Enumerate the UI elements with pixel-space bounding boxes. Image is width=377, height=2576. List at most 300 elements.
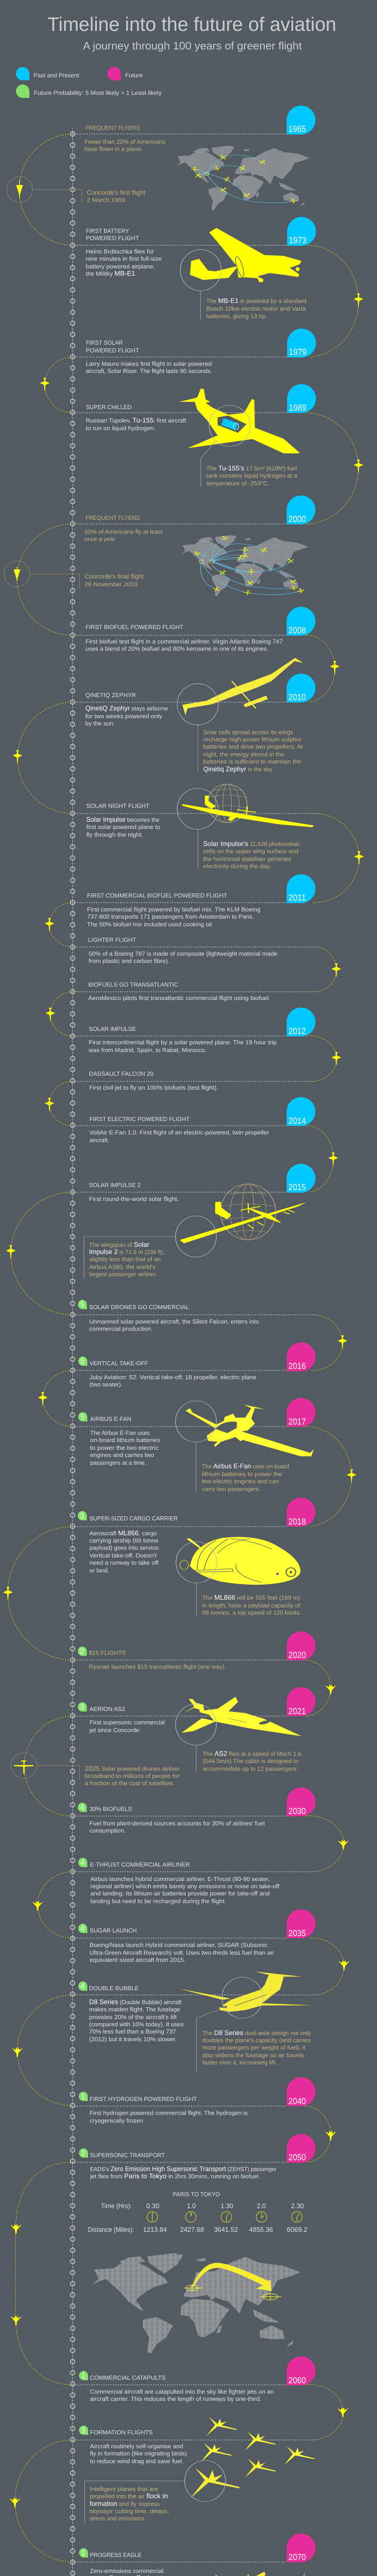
heading: $15 FLIGHTS <box>89 1650 126 1656</box>
clock icons <box>147 2212 302 2222</box>
body text <box>90 1529 160 1574</box>
heading: POWERED FLIGHT <box>86 348 139 354</box>
body text <box>88 1040 277 1054</box>
event connector lines <box>73 134 315 2562</box>
body text: battery powered airplane, <box>86 264 155 270</box>
table: Paris to Tokyo: 6069.2 <box>287 2226 307 2233</box>
heading: FORMATION FLIGHTS <box>90 2430 153 2436</box>
legend: past and present: Past and Present <box>33 73 79 79</box>
year markers: 2000 <box>288 514 306 524</box>
heading: SOLAR IMPULSE <box>89 1026 136 1032</box>
callout text <box>203 730 303 773</box>
table: Paris to Tokyo <box>88 2192 307 2233</box>
body text: payload) goes into service. <box>90 1545 160 1551</box>
callout text: The D8 Series dual-aisle design not only <box>202 2029 311 2037</box>
concorde final flight callout: Concorde's final flight <box>84 573 144 580</box>
body text: First civil jet to fly on 100% biofuels (test flight). <box>89 1085 218 1091</box>
year markers: 2040 <box>288 2096 306 2106</box>
callout text: The MB-E1 is powered by a standard <box>206 297 306 304</box>
body text: commercial production. <box>89 1326 153 1332</box>
callout text: faster over it, increasing lift. <box>202 2060 277 2066</box>
callout text: Solar cells spread across its wings <box>203 730 294 736</box>
legend: future probability <box>16 84 162 98</box>
body text <box>90 1430 160 1466</box>
1979 first solar powered flight <box>86 340 212 375</box>
year markers: 1979 <box>289 347 306 357</box>
2060 commercial catapults <box>90 2375 274 2402</box>
body text: First biofuel test flight in a commercial airliner. Virgin Atlantic Boeing 747 <box>85 639 283 645</box>
body text: The 50% biofuel mix included used cooking oil. <box>87 922 214 928</box>
2012 solar impulse <box>88 1026 277 1054</box>
legend: future: Future <box>125 73 143 79</box>
body text: 50% of Americans fly at least <box>84 529 163 535</box>
callout text <box>203 1750 303 1772</box>
heading: AIRBUS E-FAN <box>90 1416 131 1422</box>
callout text: The Tu-155's 17.5m³ (618ft³) fuel <box>206 464 297 472</box>
heading: COMMERCIAL CATAPULTS <box>90 2375 166 2381</box>
heading: FIRST BATTERY <box>86 228 129 234</box>
2070 progress eagle <box>90 2552 306 2576</box>
table: Paris to Tokyo: Distance (Miles): <box>88 2226 134 2233</box>
heading: SUPERSONIC TRANSPORT <box>90 2153 165 2159</box>
body text: provides 20% of the aircraft's lift <box>89 2014 177 2021</box>
2020 $15 flights <box>89 1650 226 1670</box>
callout text: in length, have a payload capacity of <box>202 1603 300 1609</box>
callout text: Intelligent planes that are <box>90 2486 158 2493</box>
heading <box>86 228 139 242</box>
year markers: 2020 <box>288 1650 306 1660</box>
probability badges: 4 <box>80 1858 84 1867</box>
body text: once a year. <box>84 536 116 543</box>
plane: Aerion AS2 <box>176 1697 302 1773</box>
body text: D8 Series (Double Bubble) aircraft <box>89 1998 182 2006</box>
concorde final flight callout <box>4 561 144 588</box>
callout text: Solar Impulse's 11,628 photovoltaic <box>203 840 300 848</box>
body text: Zero-emissions commercial <box>90 2568 163 2574</box>
plane: Zephyr <box>177 658 303 772</box>
callout text: carry two passengers. <box>202 1486 261 1493</box>
body text: Ultra-Green Aircraft Research) volt. Uses two-thirds less fuel than an <box>90 1950 274 1956</box>
body text: 50% of a Boeing 787 is made of composite (lightweight material made <box>89 951 278 957</box>
callout text <box>206 464 298 487</box>
probability badges: 5 <box>80 1413 84 1421</box>
callout text: the horizontal stabiliser generate <box>203 856 292 862</box>
year markers: 2030 <box>288 1806 306 1816</box>
heading: SOLAR IMPULSE 2 <box>89 1182 141 1189</box>
body text: jet flies from Paris to Tokyo in 2hrs 30mins, running on biofuel. <box>90 2172 260 2180</box>
callout text <box>90 2486 169 2522</box>
table: Paris to Tokyo: 2.30 <box>291 2202 304 2210</box>
heading: QINETIQ ZEPHYR <box>85 692 136 699</box>
body text: regional airliner) which emits barely any emissions or noise on take-off <box>91 1884 280 1890</box>
body text: Heino Brditschka flies for <box>86 249 154 255</box>
body text: cryogenically frozen. <box>90 2118 145 2124</box>
2000 frequent flyers <box>4 515 309 597</box>
legend: future probability: Future Probability: 5 Most likely > 1 Least likely <box>34 90 162 96</box>
year markers: 2008 <box>288 625 306 635</box>
body text <box>86 416 186 432</box>
body text <box>90 2165 277 2180</box>
callout text: more passengers per weight of fuel), it <box>202 2045 306 2051</box>
body text: passengers at a time. <box>90 1460 146 1466</box>
year markers: 1973 <box>289 235 306 245</box>
body text: Boeing/Nasa launch Hybrid commercial airliner, SUGAR (Subsonic <box>90 1942 268 1948</box>
body text: by the sun. <box>85 721 115 727</box>
table: Paris to Tokyo: 0.30 <box>146 2202 160 2210</box>
probability badges: 4 <box>80 1982 84 1991</box>
body text: Solar Impulse becomes the <box>87 816 160 823</box>
callout text: two electric engines and can <box>202 1479 279 1485</box>
heading: E-THRUST COMMERCIAL AIRLINER <box>90 1862 190 1868</box>
2011 first commercial biofuel powered flight <box>87 893 261 928</box>
callout text: stress and emissions. <box>90 2516 146 2522</box>
body text: 737-800 transports 171 passengers from Amsterdam to Paris. <box>87 914 254 920</box>
body text: to reduce wind drag and save fuel. <box>90 2459 184 2465</box>
body text: Commercial aircraft are catapulted into the sky like fighter jets on an <box>90 2389 274 2395</box>
body text: Ryanair launches $15 transatlantic flight (one way). <box>89 1664 226 1670</box>
body text: Fuel from plant-derived sources accounts for 30% of airlines' fuel <box>90 1821 265 1827</box>
2017 airbus e-fan <box>90 1401 314 1493</box>
body text: Aircraft routinely self-organise and <box>90 2444 183 2450</box>
title: Timeline into the future of aviation <box>47 14 336 36</box>
probability badges: 5 <box>80 1300 84 1309</box>
body text: (two seater). <box>90 1382 123 1388</box>
year markers: 2070 <box>288 2552 306 2562</box>
probability badges: 2 <box>80 1647 84 1656</box>
probability badges: 1 <box>81 2549 85 2557</box>
year markers: 2011 <box>288 893 306 903</box>
body text: (2012) but it travels 10% slower. <box>89 2037 177 2043</box>
table: Paris to Tokyo: 2.0 <box>256 2202 266 2210</box>
legend: future <box>107 67 143 80</box>
table: Paris to Tokyo: 1.30 <box>220 2202 233 2210</box>
body text <box>87 816 160 838</box>
body text: engines and carries two <box>90 1452 154 1459</box>
heading: 30% BIOFUELS <box>90 1806 132 1812</box>
body text: to power the two electric <box>90 1445 159 1451</box>
callout text: largest passenger airliner. <box>89 1272 157 1278</box>
solar night flight <box>87 784 314 870</box>
callout text <box>202 2029 311 2066</box>
table: Paris to Tokyo: PARIS TO TOKYO <box>173 2192 220 2198</box>
body text: QinetiQ Zephyr stays airborne <box>85 704 168 712</box>
body text: 70% less fuel than a Boeing 737 <box>89 2029 176 2035</box>
body text: Unmanned solar powered aircraft, the Silent Falcon, enters into <box>89 1319 259 1325</box>
plane: Tu-155 <box>179 388 299 487</box>
table: Paris to Tokyo: 3641.52 <box>214 2226 238 2233</box>
callout text: Qinetiq Zephyr in the sky. <box>203 765 273 773</box>
2040 first hydrogen powered flight <box>90 2096 248 2124</box>
solar drone callout: 2025 Solar powered drones deliver <box>84 1765 180 1772</box>
body text: First intercontinental flight by a solar powered plane. The 19 hour trip <box>89 1040 277 1046</box>
body text <box>89 951 278 964</box>
concorde callout <box>7 177 146 204</box>
body text: The Airbus E-Fan uses <box>90 1430 150 1436</box>
body text <box>87 907 261 928</box>
body text: landing but need to be recharged during the flight. <box>91 1899 226 1905</box>
body text: First supersonic commercial <box>90 1720 165 1726</box>
year markers: 1989 <box>289 403 306 413</box>
legend: past and present <box>16 67 79 80</box>
plane formation <box>84 2417 315 2523</box>
callout text: also widens the fuselage so air travels <box>202 2053 304 2059</box>
body text <box>90 1821 265 1834</box>
callout text: propelled into the air flock in <box>90 2492 168 2500</box>
plane: D8 double bubble <box>179 1972 314 2072</box>
1965 frequent flyers <box>7 125 310 210</box>
2018 super-sized cargo carrier <box>90 1516 301 1616</box>
body text: First commercial flight powered by biofuel mix. The KLM Boeing <box>87 907 261 913</box>
body text: Airbus launches hybrid commercial airliner, E-Thrust (80-90 seater, <box>91 1876 270 1883</box>
plane: Solar Impulse 2 with globe <box>84 1184 306 1279</box>
body text: Larry Mauro makes first flight in solar powered <box>86 361 212 367</box>
2050 supersonic transport <box>88 2153 307 2353</box>
year markers: 2012 <box>288 1026 306 1036</box>
callout text: cells on the upper wing surface and <box>203 849 299 855</box>
callout text <box>203 840 300 870</box>
callout text: 66 tonnes, a top speed of 120 knots. <box>202 1610 301 1616</box>
callout text: formation and fly 'express <box>90 2500 160 2507</box>
year markers: 2010 <box>288 692 306 702</box>
biofuels go transatlantic <box>88 982 270 1002</box>
year markers: 2016 <box>288 1361 306 1371</box>
table: Paris to Tokyo: Time (Hrs): <box>101 2202 132 2210</box>
body text <box>90 2110 248 2124</box>
probability badges: 4 <box>80 1803 84 1812</box>
probability badges: 2 <box>81 2149 85 2158</box>
year markers: 1965 <box>288 124 306 134</box>
heading: SUPER-SIZED CARGO CARRIER <box>90 1516 178 1522</box>
callout text: tank contains liquid hydrogen at a <box>206 473 298 479</box>
2021 aerion as2 <box>11 1697 303 1787</box>
heading: FIRST HYDROGEN POWERED FLIGHT <box>90 2096 197 2103</box>
callout text: temperature of -253°C. <box>206 481 269 487</box>
body text: aircraft. <box>90 1138 109 1144</box>
callout text: The AS2 flies at a speed of Mach 1.6. <box>203 1750 303 1757</box>
callout text: night, the energy stored in the <box>203 752 284 758</box>
callout text: batteries, giving 13 hp. <box>206 314 267 320</box>
table: Paris to Tokyo: 4855.36 <box>249 2226 273 2233</box>
heading: DASSAULT FALCON 20 <box>89 1071 153 1077</box>
heading: BIOFUELS GO TRANSATLANTIC <box>88 982 178 988</box>
heading: FIRST BIOFUEL POWERED FLIGHT <box>85 624 183 631</box>
1989 super chilled <box>86 388 299 487</box>
body text: makes maiden flight. The fuselage <box>89 2007 180 2013</box>
2015 solar impulse 2 <box>84 1182 306 1279</box>
2014 first electric powered flight <box>90 1116 269 1144</box>
callout text: The Airbus E-Fan uses on-board <box>202 1462 289 1470</box>
timeline spine of rings <box>67 128 78 2576</box>
callout text: electricity during the day. <box>203 863 271 870</box>
heading: FREQUENT FLYERS <box>85 125 140 131</box>
heading: LIGHTER FLIGHT <box>88 937 136 943</box>
solar drone callout: broadband to millions of people for <box>84 1773 180 1780</box>
body text: First hydrogen powered commercial flight. The hydrogen is <box>90 2110 248 2116</box>
body text: fly through the night. <box>87 832 143 838</box>
callout text: lithium batteries to power the <box>202 1471 282 1478</box>
2010 qinetiq zephyr <box>85 658 303 773</box>
probability badges: 5 <box>80 1357 84 1366</box>
world map with 1965 routes <box>176 146 310 210</box>
body text: Aeroscraft ML866, cargo <box>90 1529 157 1537</box>
body text: First round-the-world solar flight. <box>89 1196 179 1202</box>
year markers: 2050 <box>288 2153 306 2162</box>
body text: aircraft, Solar Riser. The flight lasts 90 seconds. <box>86 368 212 375</box>
body text <box>89 1998 184 2043</box>
body text <box>91 1876 280 1905</box>
heading: AERION AS2 <box>90 1706 125 1713</box>
2008 first biofuel powered flight <box>85 624 283 652</box>
body text: AeroMexico pilots first transatlantic commercial flight using biofuel. <box>88 995 270 1002</box>
year markers: 2021 <box>288 1706 306 1716</box>
heading: DOUBLE BUBBLE <box>89 1986 139 1992</box>
callout text <box>202 1594 301 1616</box>
airship: ML866 <box>176 1537 301 1616</box>
body text <box>89 1720 165 1734</box>
table: Paris to Tokyo: 2427.68 <box>180 2226 204 2233</box>
body text: from plastic and carbon fibre). <box>89 958 169 964</box>
table: Paris to Tokyo: 1213.84 <box>143 2226 167 2233</box>
body text: aircraft carrier. This reduces the length of runways by one-third. <box>90 2396 261 2402</box>
heading: FIRST ELECTRIC POWERED FLIGHT <box>90 1116 190 1123</box>
solar drone callout <box>11 1753 180 1787</box>
heading: PROGRESS EAGLE <box>90 2552 142 2558</box>
body text <box>90 2389 274 2402</box>
callout text <box>89 1241 165 1278</box>
body text: the Militky MB-E1. <box>86 269 137 277</box>
body text: Vertical take-off. Doesn't <box>90 1553 157 1559</box>
callout text: recharge high-power lithium-sulphur <box>203 737 302 743</box>
heading: SOLAR NIGHT FLIGHT <box>87 803 149 809</box>
body text <box>90 1130 269 1144</box>
body text: fly in formation (like migrating birds) <box>90 2451 187 2457</box>
heading: FIRST SOLAR <box>86 340 123 346</box>
heading: SOLAR DRONES GO COMMERCIAL <box>89 1304 190 1311</box>
heading: SUPER CHILLED <box>86 404 132 411</box>
heading: SUGAR LAUNCH <box>90 1928 137 1934</box>
2016 vertical take-off <box>90 1361 256 1388</box>
body text: Russian Tupolev, Tu-155: first aircraft <box>86 416 186 424</box>
body text: equivalent sized aircraft from 2015. <box>90 1957 185 1963</box>
callout text: skyways' cutting time, delays, <box>90 2509 169 2515</box>
body text: have flown in a plane. <box>84 146 143 152</box>
plane: Airbus E-Fan <box>176 1401 314 1493</box>
year markers: 2035 <box>288 1928 306 1938</box>
body text <box>90 1942 274 1963</box>
body text: EADS's Zero Emission High Supersonic Transport (ZEHST) passenger <box>90 2165 277 2173</box>
callout text: batteries is sufficient to maintain the <box>203 759 301 765</box>
body text <box>86 361 212 375</box>
concorde final flight callout: 26 November 2003. <box>84 582 139 588</box>
2035 sugar launch <box>90 1928 274 1963</box>
body text: need a runway to take off <box>90 1560 159 1566</box>
probability badges: 1 <box>81 2371 85 2380</box>
formation flights <box>84 2417 315 2523</box>
body text <box>84 529 163 543</box>
probability badges <box>78 1300 88 2557</box>
callout text: Bosch 10kw electric motor and Varta <box>206 306 306 312</box>
callout text: The ML866 will be 555 feet (169 m) <box>202 1594 300 1601</box>
callout text: batteries and drive two propellers. At <box>203 744 303 750</box>
heading: POWERED FLIGHT <box>86 235 139 242</box>
table: Paris to Tokyo: 1.0 <box>187 2202 196 2210</box>
double bubble <box>89 1972 314 2072</box>
concorde callout: Concorde's first flight <box>87 189 146 196</box>
year markers: 2015 <box>288 1182 306 1192</box>
probability badges: 1 <box>81 2092 85 2101</box>
dassault falcon 20 <box>89 1071 218 1091</box>
e-thrust commercial airliner <box>90 1862 280 1905</box>
callout text: accommodate up to 12 passengers. <box>203 1766 298 1772</box>
body text: or land. <box>90 1568 109 1574</box>
callout text <box>202 1462 289 1493</box>
probability badges: 3 <box>81 2426 85 2435</box>
body text: on-board lithium batteries <box>90 1437 160 1444</box>
legend <box>16 67 162 98</box>
callout text <box>206 297 306 320</box>
body text: and landing. Its lithium-air batteries provide power for take-off and <box>91 1891 270 1897</box>
year markers: 2017 <box>288 1417 306 1427</box>
probability badges: 4 <box>80 1924 84 1933</box>
heading: FREQUENT FLYERS <box>85 515 140 521</box>
callout text: slightly less than that of an <box>89 1257 161 1263</box>
world map with 2000 routes <box>181 535 309 597</box>
body text <box>90 1375 256 1388</box>
subtitle: A journey through 100 years of greener flight <box>83 40 302 52</box>
1973 first battery powered flight <box>86 228 306 320</box>
body text: Joby Aviation: S2. Vertical take-off, 18 propeller, electric plane <box>90 1375 256 1381</box>
callout text: doubles the plane's capacity (and carries <box>202 2038 311 2044</box>
heading: VERTICAL TAKE-OFF <box>90 1361 148 1367</box>
year markers: 2014 <box>288 1116 306 1126</box>
world map with Paris to Tokyo arrow <box>92 2253 301 2353</box>
probability badges: 3 <box>80 1703 84 1711</box>
body text: nine minutes in first full-size <box>86 256 162 262</box>
year markers <box>286 106 316 2563</box>
body text <box>85 704 168 727</box>
solar drones go commercial <box>89 1304 259 1332</box>
body text: VoltAir E-Fan 1.0. First flight of an electric-powered, twin propeller <box>90 1130 269 1136</box>
callout text: Impulse 2 is 71.9 m (236 ft), <box>89 1248 165 1256</box>
body text: consumption. <box>90 1828 126 1834</box>
callout text: (544.5m/s) The cabin is designed to <box>203 1758 299 1765</box>
lighter flight <box>88 937 278 964</box>
body text: first solar powered plane to <box>87 824 160 831</box>
year markers: 2060 <box>288 2376 306 2385</box>
body text: uses a blend of 20% biofuel and 80% kerosene in one of its engines. <box>85 646 268 652</box>
heading: FIRST COMMERCIAL BIOFUEL POWERED FLIGHT <box>87 893 227 899</box>
body text <box>89 1319 259 1332</box>
body text <box>84 139 165 152</box>
solar drone callout: a fraction of the cost of satellites. <box>84 1781 175 1787</box>
plane: Progress Eagle <box>176 2571 306 2576</box>
body text <box>90 2444 187 2465</box>
body text <box>86 249 162 277</box>
plane: Solar Impulse with globe <box>177 784 314 869</box>
body text: jet since Concorde. <box>89 1727 141 1734</box>
body text <box>85 639 283 652</box>
plane: MB-E1 <box>180 228 302 319</box>
body text: was from Madrid, Spain, to Rabat, Morocco. <box>88 1047 207 1054</box>
body text: for two weeks powered only <box>85 714 162 720</box>
body text: carrying airship (66 tonne <box>90 1538 159 1544</box>
body text: to run on liquid hydrogen. <box>86 426 156 432</box>
year markers: 2018 <box>288 1517 306 1527</box>
callout text: Airbus A380, the world's <box>89 1264 156 1270</box>
callout text: The wingspan of Solar <box>89 1241 150 1248</box>
2030 30% biofuels <box>90 1806 265 1834</box>
concorde callout: 2 March 1969. <box>87 197 127 204</box>
